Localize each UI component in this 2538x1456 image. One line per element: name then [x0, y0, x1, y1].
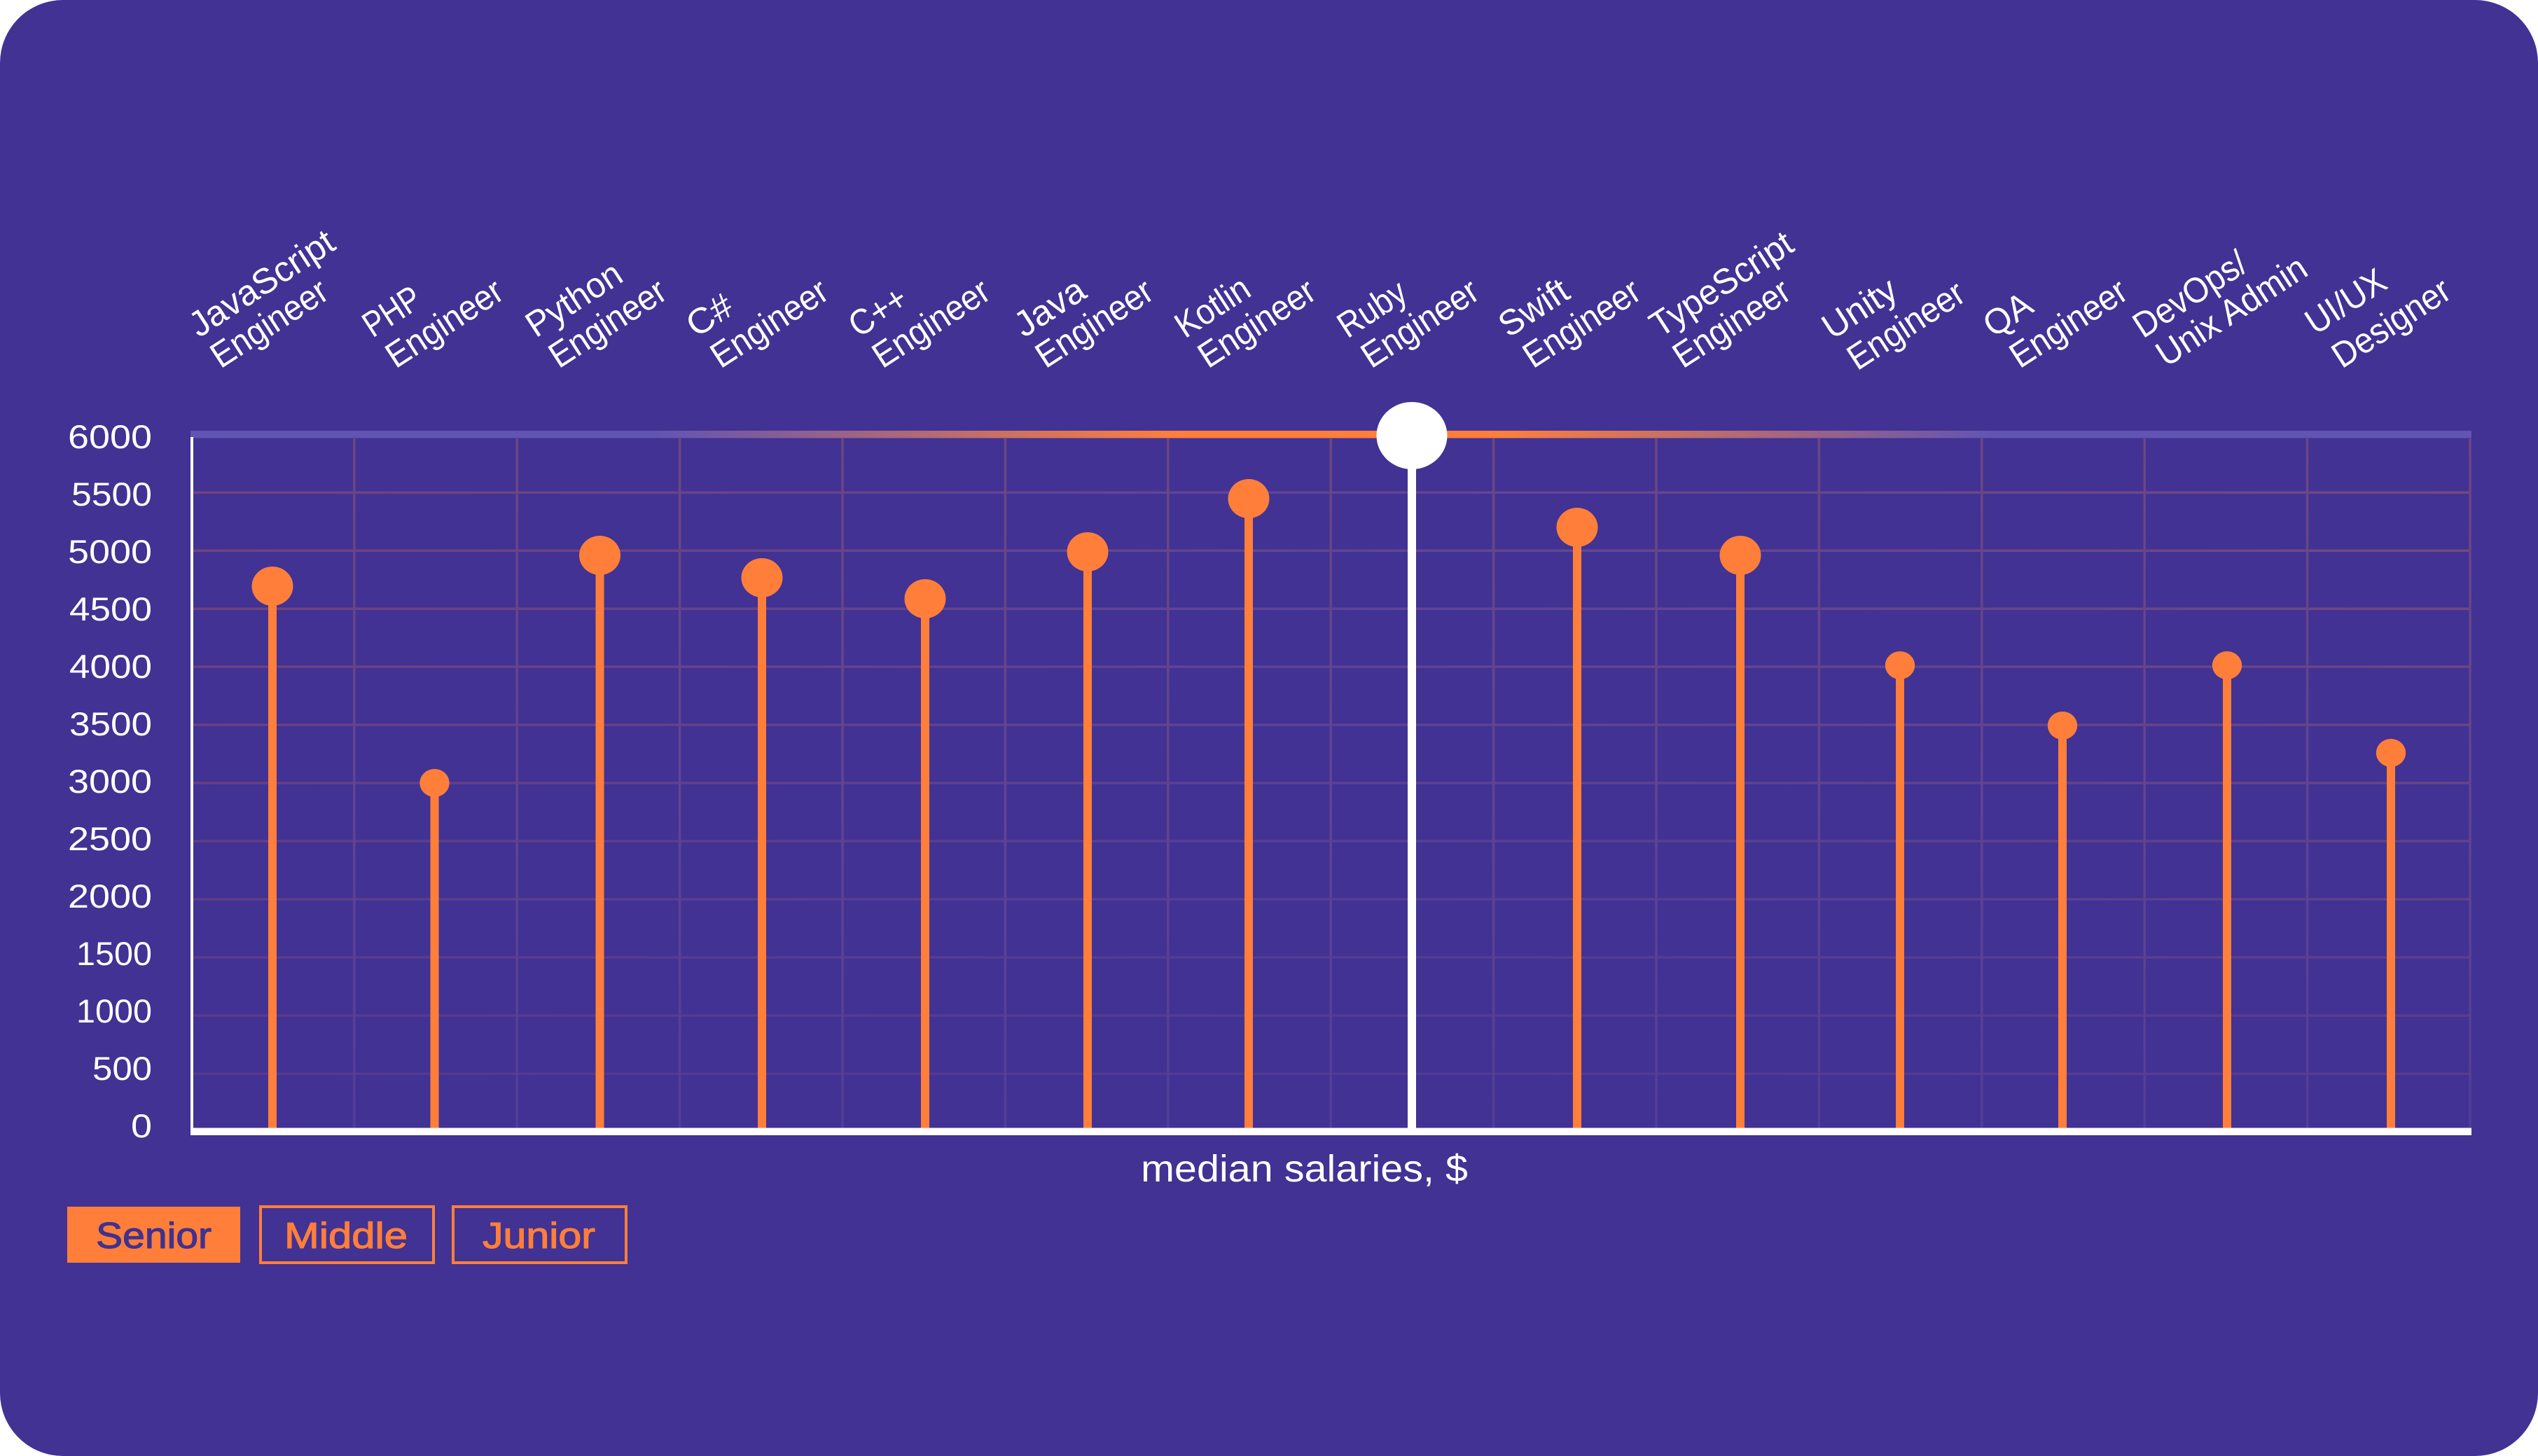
- category label: Java Engineer: Java: [1006, 269, 1093, 345]
- y axis labels: 2500: [68, 820, 152, 857]
- top gradient bar: [190, 431, 2471, 438]
- category label: Python Engineer: Engineer: [541, 270, 674, 375]
- lollipop: Swift Engineer: [1556, 508, 1598, 1128]
- category label: TypeScript Engineer: TypeScript: [1642, 223, 1801, 345]
- lollipop: PHP Engineer: [419, 769, 450, 1128]
- category label: PHP Engineer: PHP: [355, 277, 429, 345]
- category label: Unity Engineer: Unity: [1815, 269, 1905, 347]
- category label: Java Engineer: Engineer: [1028, 270, 1160, 375]
- x axis title: median salaries, $: [1141, 1148, 1468, 1190]
- y axis labels: 0: [131, 1107, 152, 1144]
- y axis labels: 3000: [68, 763, 152, 800]
- category label: C++ Engineer: C++: [841, 277, 915, 345]
- category label: Ruby Engineer: Ruby: [1330, 271, 1414, 345]
- category label: Swift Engineer: Engineer: [1516, 270, 1648, 375]
- y axis labels: 4000: [69, 648, 152, 685]
- category label: JavaScript Engineer: Engineer: [203, 270, 335, 375]
- y axis labels: 4500: [69, 590, 152, 628]
- y axis labels: 1000: [76, 992, 152, 1029]
- y axis labels: 6000: [68, 418, 152, 455]
- category label: C# Engineer: Engineer: [703, 270, 835, 375]
- category label: Ruby Engineer: Engineer: [1354, 270, 1486, 375]
- y axis labels: [68, 418, 152, 1144]
- lollipop: UI/UX Designer: [2376, 739, 2406, 1128]
- lollipop: DevOps / Unix Admin: [2212, 651, 2242, 1128]
- category label: C++ Engineer: Engineer: [865, 270, 997, 375]
- y axis labels: 5500: [71, 476, 152, 513]
- lollipop: QA Engineer: [2048, 712, 2077, 1128]
- legend: Junior: Junior: [483, 1216, 595, 1256]
- category label: Unity Engineer: Engineer: [1840, 272, 1972, 377]
- category label: Kotlin Engineer: Kotlin: [1167, 268, 1257, 345]
- legend: Middle: Middle: [284, 1216, 408, 1256]
- legend: Junior: [453, 1207, 626, 1263]
- lollipop: Python Engineer: [579, 536, 620, 1128]
- lollipop: TypeScript Engineer: [1720, 536, 1761, 1128]
- category label: UI/UX Designer: Designer: [2324, 270, 2457, 375]
- category label: Swift Engineer: Swift: [1491, 270, 1576, 345]
- lollipop: C# Engineer: [741, 558, 783, 1128]
- category label: C# Engineer: C#: [679, 285, 741, 345]
- category label: DevOps / Unix Admin: Unix Admin: [2149, 247, 2314, 374]
- legend: Senior (active): [67, 1207, 240, 1263]
- lollipop: Ruby Engineer highlighted: [1377, 402, 1447, 1128]
- lollipop: Unity Engineer: [1885, 651, 1915, 1128]
- lollipop: C++ Engineer: [905, 579, 945, 1128]
- legend: Senior (active): Senior: [96, 1216, 212, 1256]
- category label: QA Engineer: QA: [1976, 284, 2039, 345]
- chart: median salaries lollipop chart: [190, 402, 2471, 1135]
- lollipop: Kotlin Engineer: [1228, 479, 1269, 1128]
- y axis labels: 3500: [69, 705, 152, 742]
- lollipop: JavaScript Engineer: [252, 567, 293, 1128]
- category label: DevOps / Unix Admin: DevOps/: [2126, 242, 2254, 345]
- legend: Middle: [261, 1207, 434, 1263]
- category label: TypeScript Engineer: Engineer: [1665, 270, 1798, 375]
- category label: JavaScript Engineer: JavaScript: [181, 221, 342, 345]
- category label: QA Engineer: Engineer: [2002, 270, 2135, 375]
- y axis labels: 500: [92, 1050, 152, 1087]
- y axis labels: 2000: [68, 878, 152, 915]
- category label: Python Engineer: Python: [518, 254, 629, 345]
- category label: PHP Engineer: Engineer: [378, 270, 511, 375]
- y axis labels: 5000: [68, 533, 152, 570]
- x axis line: [190, 1128, 2471, 1135]
- y axis line: [190, 437, 193, 1128]
- category label: UI/UX Designer: UI/UX: [2298, 261, 2394, 342]
- y axis labels: 1500: [76, 935, 152, 972]
- category label: Kotlin Engineer: Engineer: [1191, 270, 1323, 375]
- lollipop: Java Engineer: [1067, 532, 1108, 1128]
